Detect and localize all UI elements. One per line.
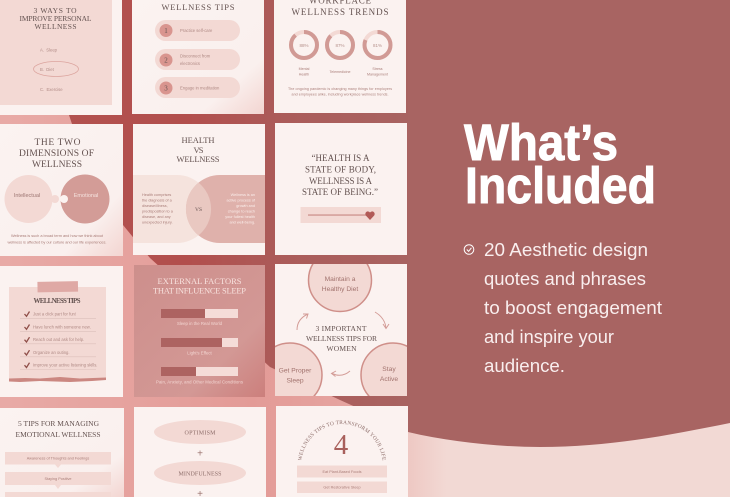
card: workplace wellness trends: Stress: [372, 67, 383, 71]
card: wellness tips pills: 3: [164, 84, 168, 92]
card: wellness tips checklist: [0, 266, 123, 397]
card: workplace wellness trends: The ongoing pandemic is changing many things for employers: [288, 87, 392, 91]
card: workplace wellness trends: WELLNESS TRENDS: [292, 7, 388, 17]
card: external factors: [134, 265, 265, 397]
card: quote: STATE OF BEING.”: [302, 187, 378, 197]
card: health vs wellness: disease/illness,: [142, 204, 168, 208]
card: wellness tips pills: 1: [164, 27, 168, 35]
card: health vs wellness: predisposition to a: [142, 210, 174, 214]
card: 3 ways: 3 WAYS TO: [34, 6, 77, 15]
card: health vs wellness: VS: [195, 207, 202, 213]
card: quote: STATE OF BODY,: [305, 164, 376, 174]
card: 3 important tips: [275, 264, 407, 396]
background: pink diagonal: [0, 112, 420, 497]
text: description: quotes and phrases: [484, 268, 646, 289]
text: description: [484, 239, 662, 376]
heading: What's Included: What’s: [464, 114, 618, 171]
background: red area: [0, 0, 420, 497]
card: two dimensions: Emotional: [74, 193, 98, 199]
card: external factors: Pain, Anxiety, and Other Medical Conditions: [156, 380, 243, 384]
card: two dimensions: DIMENSIONS OF: [19, 149, 94, 159]
card: 4 wellness tips: WELLNESS TIPS TO TRANSFORM YOUR LIFE: [298, 420, 386, 460]
card: 3 ways: IMPROVE PERSONAL: [20, 14, 92, 23]
card: 3 ways: B. Diet: [40, 67, 55, 72]
text: description: to boost engagement: [484, 297, 662, 318]
card: 3 important tips: Get Proper: [279, 368, 312, 374]
card: health vs wellness: unexpected injury.: [142, 220, 173, 224]
text: description: audience.: [484, 355, 565, 376]
card: workplace wellness trends: Mental: [299, 67, 310, 71]
card: quote: [275, 123, 407, 255]
card: health vs wellness: HEALTH: [182, 135, 214, 145]
card: 3 important tips: 3 IMPORTANT: [316, 324, 367, 333]
wave: bottom right: [408, 423, 730, 497]
text: description: and inspire your: [484, 326, 614, 347]
card: health vs wellness: WELLNESS: [176, 154, 220, 164]
card: 3 important tips: WOMEN: [326, 344, 357, 353]
card: wellness tips pills: Disconnect from: [180, 54, 211, 58]
card: wellness tips pills: WELLNESS TIPS: [162, 2, 235, 12]
card: 5 tips: 5 TIPS FOR MANAGING: [18, 419, 100, 428]
card: 4 wellness tips: 4: [334, 429, 349, 461]
card: health vs wellness: your fullest health: [225, 215, 255, 219]
card: two dimensions: [0, 124, 123, 256]
card: wellness tips checklist: Have lunch with someone new.: [33, 324, 91, 330]
card: workplace wellness trends: 87%: [335, 43, 345, 48]
icon: check circle: [464, 245, 474, 254]
panel: right text panel: [408, 0, 730, 497]
card: 3 important tips: WELLNESS TIPS FOR: [306, 334, 377, 343]
card: quote: “HEALTH IS A: [312, 153, 370, 163]
card: external factors: Sleep in the Real World: [177, 321, 223, 326]
card: wellness tips pills: Practice self-care: [180, 28, 213, 33]
card: optimism mindfulness: [134, 407, 266, 497]
card: health vs wellness: [133, 124, 265, 255]
card: workplace wellness trends: and employees alike, including workplace wellness trends.: [292, 92, 388, 96]
card: wellness tips checklist: Reach out and ask for help.: [33, 337, 84, 342]
card: two dimensions: WELLNESS: [32, 160, 82, 170]
card: health vs wellness: growth and: [236, 204, 255, 208]
card: workplace wellness trends: [274, 0, 406, 113]
heading: What's Included: [464, 114, 656, 214]
card: 5 tips: Awareness of Thoughts and Feelings: [27, 456, 89, 460]
card: workplace wellness trends: Telemedicine: [330, 70, 350, 74]
card: 5 tips: [0, 408, 124, 497]
card: health vs wellness: the diagnosis of a: [142, 198, 173, 202]
card: health vs wellness: change to reach: [228, 210, 255, 214]
card: 4 wellness tips: Get Restorative Sleep: [323, 486, 361, 490]
card: wellness tips checklist: Improve your active listening skills.: [33, 362, 97, 368]
card: wellness tips checklist: WELLNESS TIPS: [34, 297, 81, 305]
card: 3 ways: C. Exercise: [40, 87, 63, 92]
card: wellness tips pills: 2: [164, 56, 168, 64]
card: 3 ways: WELLNESS: [34, 22, 76, 31]
card: two dimensions: Wellness is such a broad term and how we think about: [11, 233, 104, 238]
card: 5 tips: Staying Positive: [44, 477, 72, 481]
card: 5 tips: EMOTIONAL WELLNESS: [16, 430, 100, 439]
card: workplace wellness trends: Health: [299, 72, 309, 76]
card: health vs wellness: disease, and any: [142, 215, 171, 219]
card: external factors: EXTERNAL FACTORS: [158, 276, 242, 286]
card: 3 important tips: Maintain a: [325, 276, 356, 283]
card: 3 important tips: Sleep: [286, 378, 304, 384]
card: workplace wellness trends: 81%: [373, 43, 382, 48]
card: health vs wellness: active process of: [226, 198, 256, 202]
card: external factors: Light's Effect: [187, 350, 212, 356]
card: 4 wellness tips: [276, 406, 408, 497]
card: 3 important tips: Stay: [382, 366, 396, 373]
card: wellness tips pills: electronics: [180, 61, 200, 66]
card: 3 important tips: Healthy Diet: [322, 286, 358, 293]
card: health vs wellness: and well-being.: [229, 220, 255, 224]
card: optimism mindfulness: +: [197, 448, 203, 460]
card: health vs wellness: Health comprises: [142, 193, 171, 197]
card: 3 ways: [0, 0, 122, 115]
card: wellness tips checklist: Just a click part for fun!: [33, 312, 76, 316]
card: 4 wellness tips: Eat Plant-Based Foods: [322, 470, 362, 474]
card: workplace wellness trends: 88%: [299, 43, 309, 48]
card: two dimensions: wellness is affected by our culture and our life experiences.: [8, 240, 106, 244]
card: optimism mindfulness: OPTIMISM: [184, 430, 216, 436]
card: workplace wellness trends: Management: [367, 72, 388, 76]
card: wellness tips pills: Engage in meditation: [180, 86, 220, 90]
card: optimism mindfulness: MINDFULNESS: [178, 472, 222, 478]
card: wellness tips checklist: Organize an outing.: [33, 350, 70, 355]
card: health vs wellness: Wellness is an: [231, 193, 255, 197]
card: external factors: THAT INFLUENCE SLEEP: [153, 286, 246, 296]
card: two dimensions: Intellectual: [14, 193, 40, 199]
card: quote: WELLNESS IS A: [309, 176, 372, 186]
text: description: 20 Aesthetic design: [484, 239, 648, 260]
card: health vs wellness: VS: [194, 145, 204, 155]
card: wellness tips pills: [132, 0, 264, 114]
card: two dimensions: THE TWO: [34, 138, 81, 148]
card: 3 ways: A. Sleep: [40, 48, 58, 52]
card: 3 important tips: Active: [380, 376, 398, 383]
heading: What's Included: Included: [465, 157, 656, 214]
